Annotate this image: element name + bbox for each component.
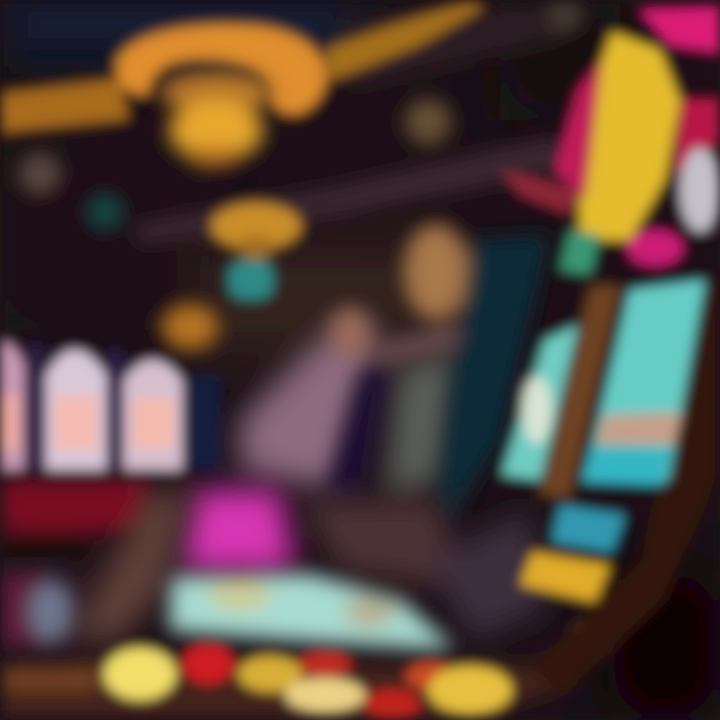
pink floor [180,490,295,570]
central figures [240,320,460,500]
dark red bottom edge [0,640,600,720]
golden ceiling arcs [0,0,485,133]
slot machine screens [502,280,705,602]
coloured bottom lights [104,618,614,719]
lower hanging lamp [210,202,302,300]
floor dark tones [70,490,545,640]
machine upper sign [500,8,720,275]
chandelier centre [160,72,276,166]
arched windows left [0,342,220,470]
ceiling band [130,0,590,245]
light teal game table [170,575,455,650]
small distant lights [20,0,581,349]
red carpet band left [0,480,150,645]
slot machine frame [530,275,720,695]
